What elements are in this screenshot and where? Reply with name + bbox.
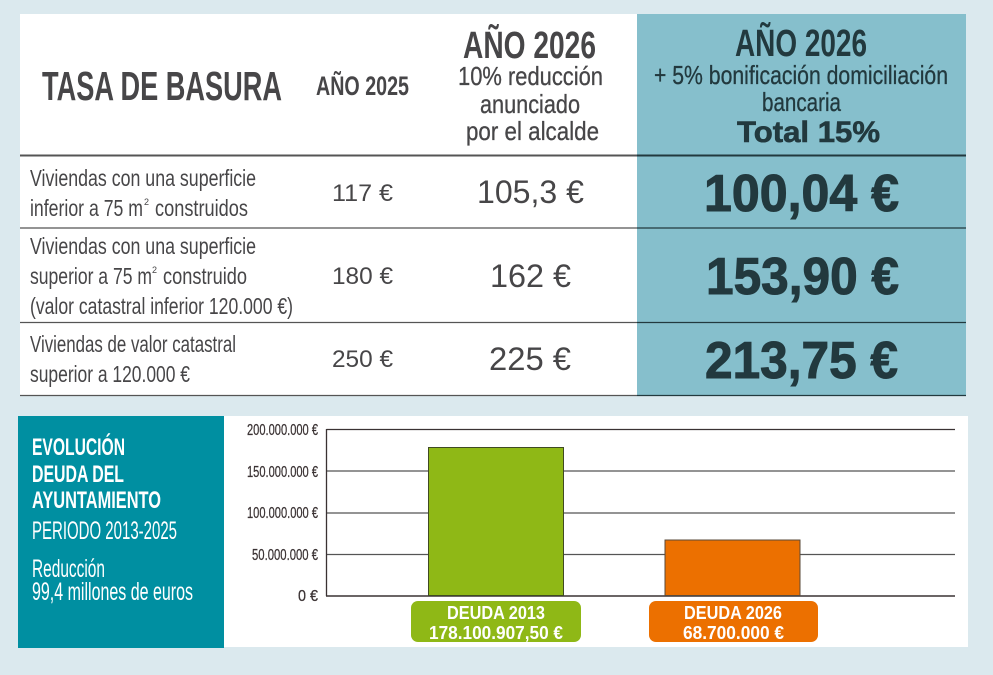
column heading: año 2026 reduction <box>458 23 603 146</box>
2026 total values: 153,90 € <box>706 248 899 306</box>
label: debt 2026: 68.700.000 € <box>683 623 784 643</box>
row 1 description: inferior a 75 m <box>30 195 143 221</box>
sidebar: debt summary: AYUNTAMIENTO <box>32 487 161 514</box>
row 1 description: 2 <box>144 197 149 207</box>
column heading: año 2026 reduction: por el alcalde <box>466 116 599 146</box>
row 2 description: (valor catastral inferior 120.000 €) <box>30 293 293 319</box>
row 3 description <box>30 331 236 387</box>
sidebar: debt summary: 99,4 millones de euros <box>32 578 193 606</box>
highlighted column background <box>637 14 966 396</box>
2026 values: 162 € <box>490 258 571 294</box>
2026 values <box>477 174 584 377</box>
row 3 description: superior a 120.000 € <box>30 361 190 387</box>
2025 values <box>332 180 394 373</box>
axis labels: 50.000.000 € <box>252 547 318 564</box>
column heading: año 2026 total 15%: Total 15% <box>737 116 880 149</box>
2025 values: 250 € <box>332 346 394 373</box>
row 2 description: Viviendas con una superficie <box>30 233 256 259</box>
axis labels: 150.000.000 € <box>247 464 318 481</box>
sidebar: debt summary: PERIODO 2013-2025 <box>32 517 177 545</box>
column heading: año 2026 total 15%: bancaria <box>762 87 841 117</box>
2025 values: 117 € <box>332 180 394 207</box>
panel: debt evolution <box>18 416 968 648</box>
sidebar: debt summary: Reducción <box>32 555 105 583</box>
row 2 description: construido <box>163 263 247 289</box>
2026 total values <box>704 165 899 390</box>
panel: garbage tax table <box>20 14 966 396</box>
bar: debt 2026 <box>665 540 800 596</box>
column heading: año 2026 reduction: 10% reducción <box>458 61 603 91</box>
axis labels: 200.000.000 € <box>247 422 318 439</box>
column heading: año 2026 total 15% <box>654 21 948 149</box>
axis labels <box>247 422 318 605</box>
row 1 description: construidos <box>155 195 248 221</box>
bar chart <box>247 422 955 643</box>
row 2 description <box>30 233 293 319</box>
column heading: año 2025: AÑO 2025 <box>316 70 409 101</box>
2026 total values: 213,75 € <box>705 332 898 390</box>
axis labels: 0 € <box>298 588 318 605</box>
label: debt 2026: DEUDA 2026 <box>684 603 782 623</box>
axis labels: 100.000.000 € <box>247 505 318 522</box>
2026 values: 225 € <box>489 341 571 377</box>
column heading: año 2026 reduction: anunciado <box>480 89 580 119</box>
row 1 description <box>30 165 256 221</box>
2026 total values: 100,04 € <box>704 165 899 223</box>
sidebar: debt summary <box>18 416 224 648</box>
2025 values: 180 € <box>332 263 394 290</box>
label: debt 2013: 178.100.907,50 € <box>429 623 563 643</box>
label: debt 2013: DEUDA 2013 <box>447 603 545 623</box>
bar: debt 2013 <box>428 448 564 596</box>
row 1 description: Viviendas con una superficie <box>30 165 256 191</box>
label: debt 2013 <box>411 601 581 643</box>
row 2 description: superior a 75 m <box>30 263 152 289</box>
label: debt 2026 <box>649 601 818 643</box>
2026 values: 105,3 € <box>477 174 584 210</box>
row 3 description: Viviendas de valor catastral <box>30 331 236 357</box>
column heading: año 2026 total 15%: AÑO 2026 <box>735 21 867 65</box>
sidebar: debt summary: EVOLUCIÓN <box>32 433 125 461</box>
heading: tasa de basura: TASA DE BASURA <box>42 63 282 109</box>
column heading: año 2026 reduction: AÑO 2026 <box>463 23 596 67</box>
row 2 description: 2 <box>152 265 157 275</box>
sidebar: debt summary: DEUDA DEL <box>32 461 124 488</box>
